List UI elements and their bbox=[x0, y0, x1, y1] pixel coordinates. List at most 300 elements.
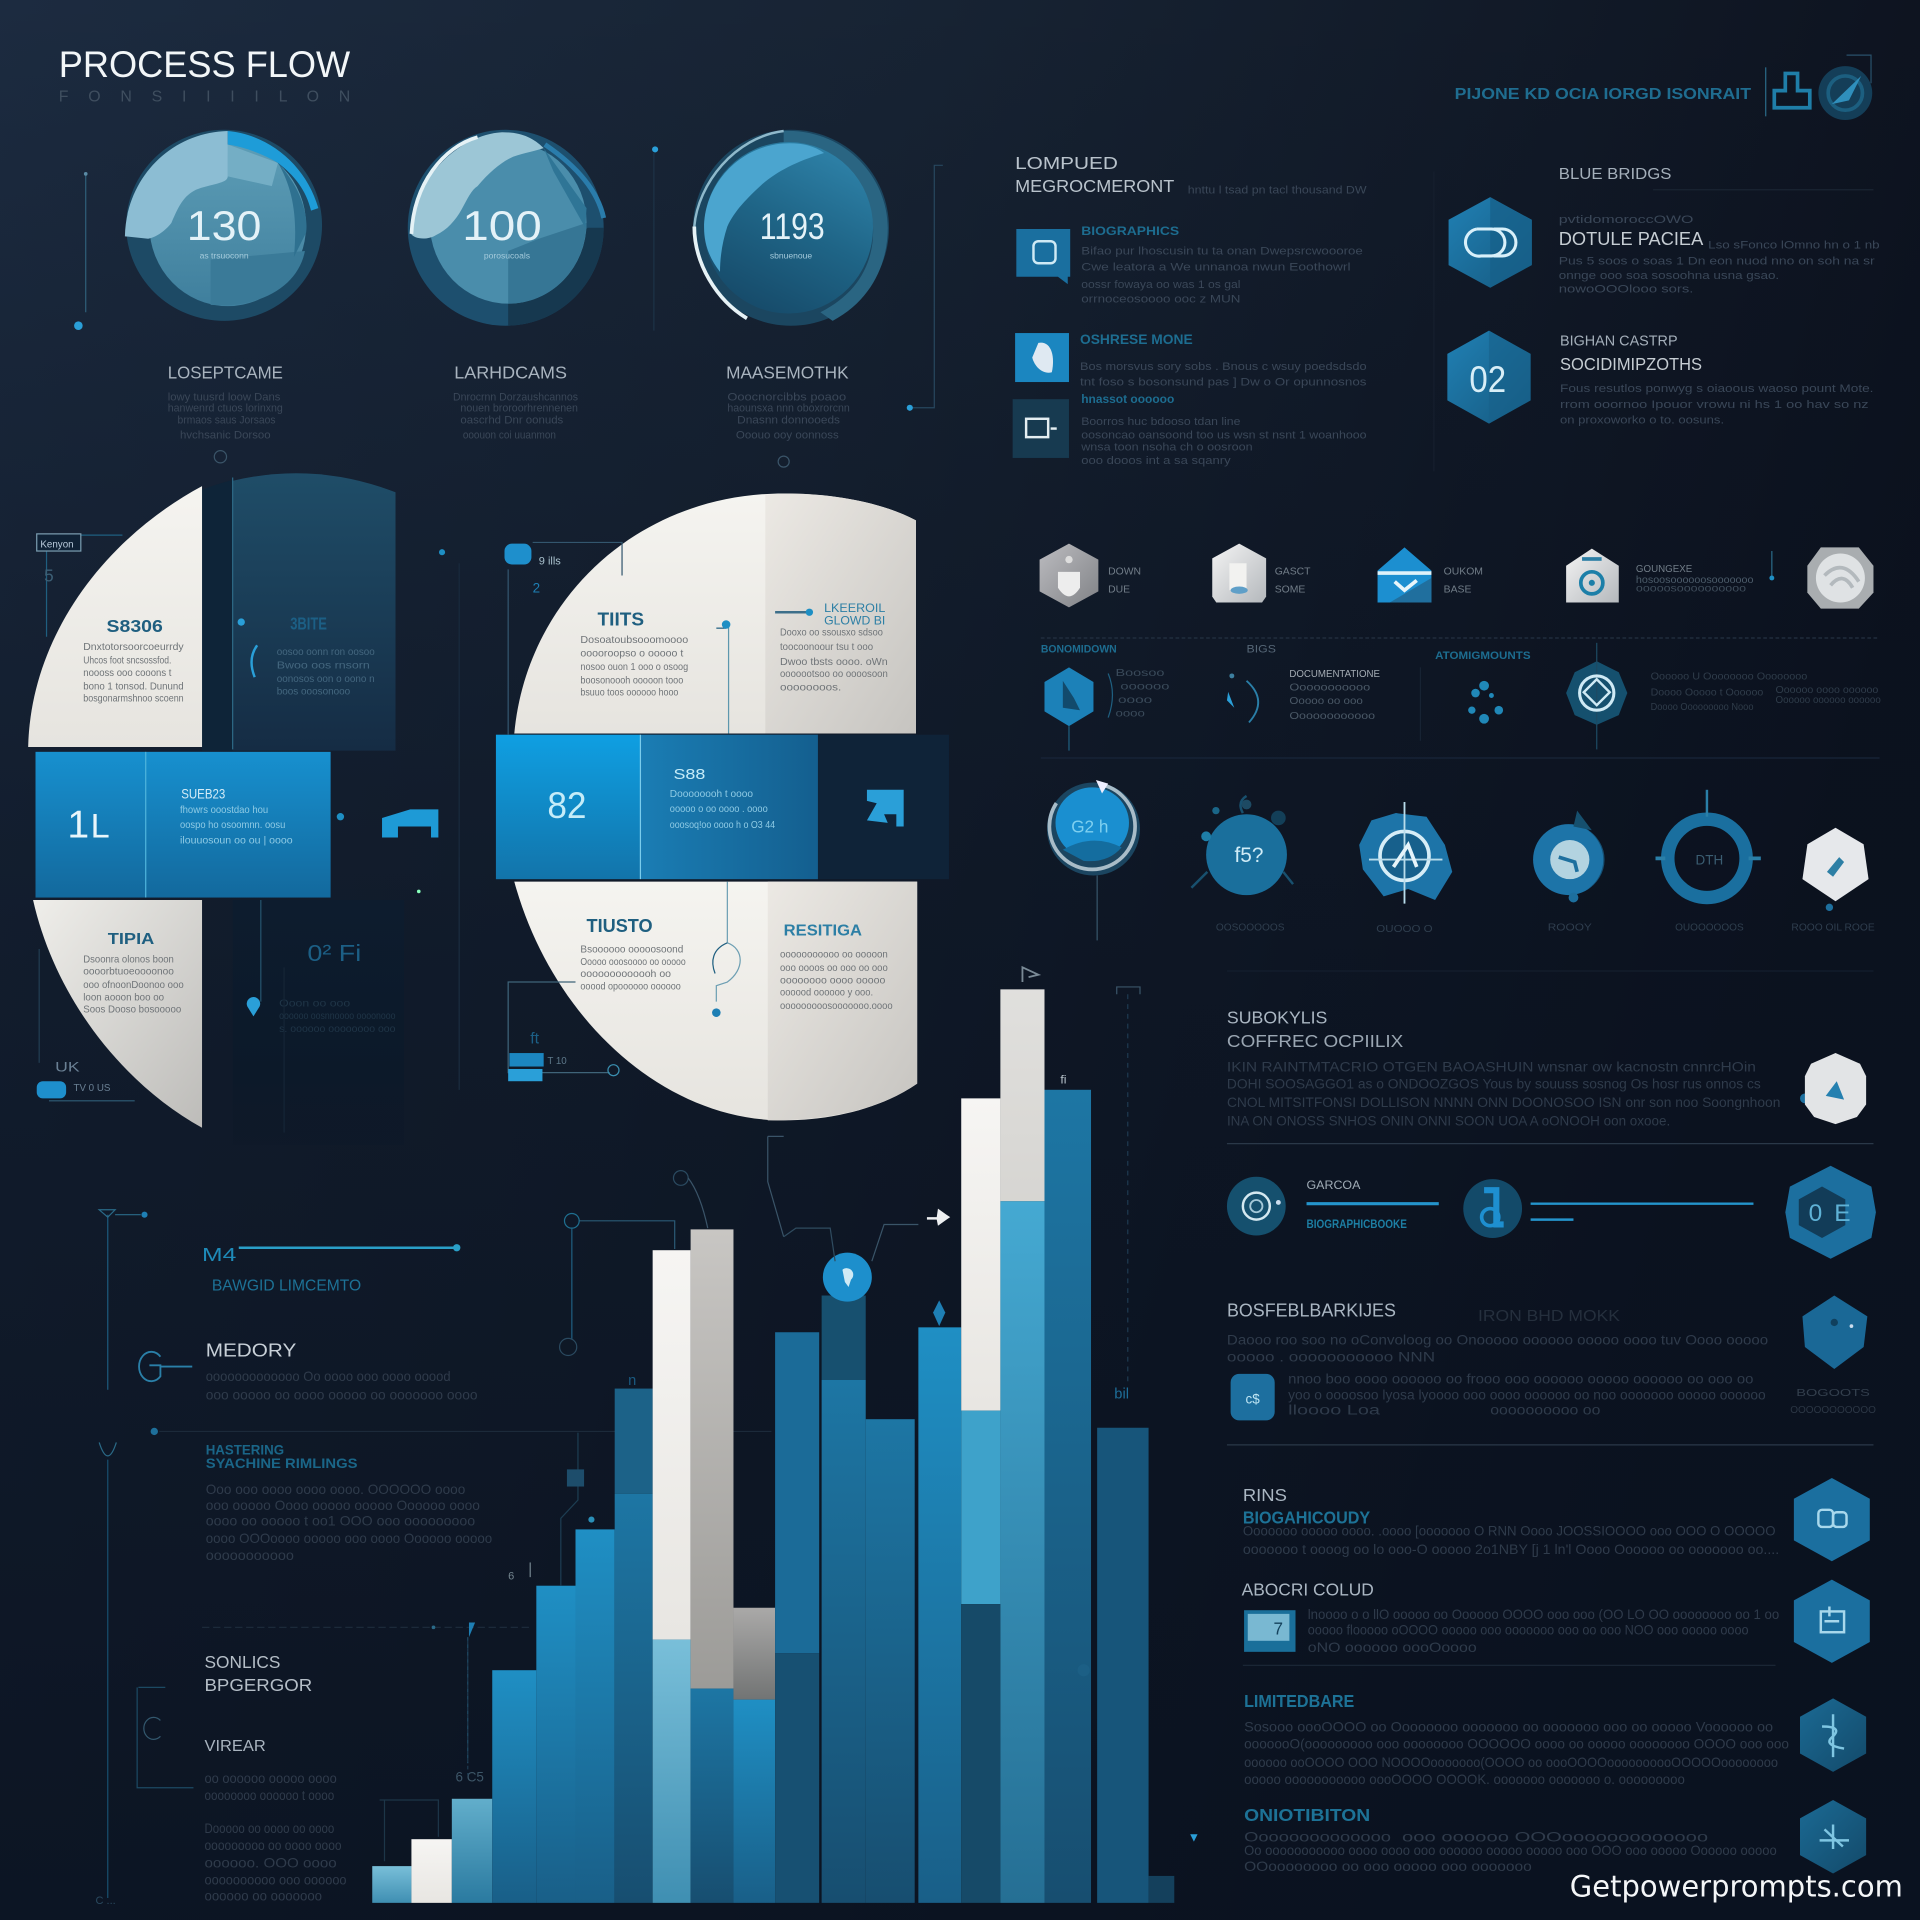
bar chart bbox=[372, 967, 1174, 1903]
icon row 2: oooooo bbox=[1120, 681, 1170, 692]
divider bbox=[1227, 970, 1873, 972]
gauge captions: Ooouo ooy oonnoss bbox=[736, 429, 839, 441]
left text panel: hastening: oooo OOOoooo ooooo ooo oooo Oooooo ooooo bbox=[206, 1531, 492, 1546]
marker: flag bbox=[1022, 967, 1038, 982]
item 3: wnsa toon nsoha ch o oosroon bbox=[1080, 442, 1253, 454]
callouts around right circle: 9 ills bbox=[539, 555, 561, 567]
item 2: tnt foso s bosonsund pas ] Dw o Or opunnosnos bbox=[1080, 377, 1367, 389]
icon: ring: DTH bbox=[1696, 852, 1723, 867]
panel: rins cloud bbox=[1242, 1478, 1870, 1665]
panel: limited bare bbox=[1244, 1691, 1866, 1874]
gauge 2: porosucoals bbox=[484, 250, 530, 260]
panel: right split circle: ooood opoooooo oooooo bbox=[580, 981, 681, 992]
gauge captions: hvchsanic Dorsoo bbox=[180, 429, 271, 441]
icon: splat circle: f5? bbox=[1235, 844, 1263, 867]
panel: left split circle: 1 bbox=[67, 804, 89, 847]
icon: large hex: 0 bbox=[1809, 1200, 1822, 1227]
icon: large hex bbox=[1785, 1166, 1876, 1259]
panel: blue bridges: DOTULE PACIEA bbox=[1559, 228, 1704, 249]
icon: blue square bbox=[1015, 333, 1069, 382]
title bbox=[59, 44, 351, 106]
panel: left split circle: ilouuosoun oo ou | oooo bbox=[180, 836, 293, 847]
icon: white hex bbox=[1800, 1053, 1866, 1124]
gauge captions: lowy tuusrd loow Dans bbox=[168, 391, 281, 403]
gauge captions: Dnasnn donnooeds bbox=[737, 415, 841, 427]
icon row 2: Doooo Ooooo t Oooooo bbox=[1651, 688, 1763, 699]
icon: white hex bbox=[1212, 544, 1266, 602]
left text panel: hastening: SYACHINE RIMLINGS bbox=[206, 1456, 358, 1471]
gauge captions: Ooocnorcibbs poaoo bbox=[727, 391, 846, 403]
icon row 2: Oooooo oooooo oooooo bbox=[1776, 695, 1881, 706]
icon labels: ROOO OIL ROOE bbox=[1791, 923, 1875, 934]
panel: left split circle: Uhcos foot sncsossfod. bbox=[83, 656, 171, 667]
icon row 1: OUKOM bbox=[1444, 566, 1483, 577]
header tag with icons: PIJONE KD OCIA IORGD ISONRAIT bbox=[1455, 86, 1751, 103]
gauge captions: nouen broroorhrennenen bbox=[460, 402, 578, 414]
icon: blue bridge bbox=[382, 809, 438, 838]
icon: spiral bbox=[1227, 1177, 1286, 1236]
panel: right split circle: boosonoooh ooooon tooo bbox=[580, 675, 683, 686]
panel: right split circle: ooooooooooooh oo bbox=[580, 969, 671, 980]
panel: progress row bbox=[1227, 1166, 1876, 1259]
panel: blue bridges: BLUE BRIDGS bbox=[1559, 166, 1671, 183]
left text panel: sonics: oooooo. OOO oooo bbox=[204, 1855, 337, 1870]
panel: right split circle: Bsoooooo ooooosoond bbox=[580, 945, 683, 956]
icon: target splat bbox=[1359, 802, 1452, 904]
icon row 2: Doooo Ooooooooo Nooo bbox=[1651, 702, 1754, 713]
panel: right split circle: Dosoatoubsooomoooo bbox=[580, 635, 688, 646]
gauge captions bbox=[168, 362, 850, 441]
icon: badge bbox=[1231, 1374, 1275, 1420]
item 2: Bos morsvus sory sobs . Bnous c wsuy poedsdsdo bbox=[1080, 361, 1367, 373]
bar chart: fi bbox=[1060, 1073, 1067, 1087]
icon row 1: ooooosoooooooooo bbox=[1636, 583, 1746, 594]
icon: lens circle bbox=[1533, 811, 1605, 902]
hexagon icon bbox=[1794, 1478, 1870, 1561]
left text panel: sonics: oooooooo oooooo t oooo bbox=[204, 1788, 334, 1803]
gauge 2 value: 100 bbox=[462, 202, 542, 249]
panel: progress row: BIOGRAPHICBOOKE bbox=[1307, 1217, 1407, 1231]
icon: key bbox=[1463, 1179, 1522, 1238]
panel: rins cloud: BIOGAHICOUDY bbox=[1243, 1507, 1371, 1527]
panel: right split circle bbox=[496, 493, 949, 1120]
gauge captions: brmaos saus Jorsaos bbox=[178, 415, 276, 427]
title: F O N S I I I I L O N bbox=[59, 89, 350, 106]
panel: right split circle: ooooootsoo oo oooosoon bbox=[780, 669, 888, 680]
left text panel: memory: ooo ooooo oo oooo ooooo oo ooooooo oooo bbox=[206, 1388, 478, 1403]
left text panel: sonics: ooooooooo oo oooo oooo bbox=[204, 1838, 342, 1853]
item 1: Cwe leatora a We unnanoa nwun Eoothowrl bbox=[1081, 262, 1351, 274]
icon: stamp bbox=[1774, 73, 1810, 108]
icon: globe ring bbox=[1047, 780, 1140, 940]
panel: left split circle: ooo ofnoonDoonoo ooo bbox=[83, 980, 184, 991]
panel: possible ranks: lloooo Loa bbox=[1288, 1402, 1381, 1417]
panel: possible ranks: OOOOOOOOOOO bbox=[1790, 1405, 1876, 1416]
icon: blue hex bbox=[1044, 667, 1093, 751]
item 3 bbox=[1080, 393, 1367, 467]
panel: blue bridges: Fous resutlos ponwyg s oiaoous waoso pount Mote. bbox=[1560, 383, 1873, 395]
panel: blue bridges: BIGHAN CASTRP bbox=[1560, 333, 1678, 349]
icon row 3 bbox=[1047, 780, 1875, 940]
panel: limited bare: Sosooo oooOOOO oo Oooooooo ooooooo oo ooooooo ooo oo ooooo Voooooo oo bbox=[1244, 1719, 1773, 1734]
icon row 1: GASCT bbox=[1275, 566, 1311, 577]
gauge captions: MAASEMOTHK bbox=[726, 362, 849, 382]
panel: left split circle: oonosos oon o oono n bbox=[277, 674, 375, 685]
panel: left split circle: SUEB23 bbox=[181, 786, 225, 801]
panel: left split circle: TIPIA bbox=[108, 931, 155, 948]
panel: blue bridges: rrom ooornoo Ipouor vrowu ni hs 1 oo hav so nz bbox=[1560, 399, 1869, 411]
panel: left split circle: boos ooosonooo bbox=[277, 686, 350, 697]
left text panel: sonics: oo oooooo ooooo oooo bbox=[204, 1771, 337, 1786]
marker: rocket bbox=[927, 1209, 950, 1226]
left text panel: sonics: VIREAR bbox=[204, 1738, 266, 1755]
panel: possible ranks: yoo o oooosoo lyosa lyoooo ooo oooo oooooo oo noo ooooooo ooooo oooooo bbox=[1288, 1388, 1766, 1403]
panel: landscape measurement bbox=[1013, 153, 1367, 467]
icon: band glyph bbox=[867, 790, 904, 827]
bottom dark panel bbox=[233, 900, 404, 1145]
icon labels: OUOOOOOOS bbox=[1675, 923, 1744, 934]
panel: limited bare: ONIOTIBITON bbox=[1244, 1805, 1370, 1825]
gauge captions: LOSEPTCAME bbox=[168, 362, 283, 382]
top half bbox=[514, 493, 916, 733]
panel: possible ranks: BOGOOTS bbox=[1796, 1388, 1870, 1399]
panel: subject coffee: COFFREC OCPIILIX bbox=[1227, 1031, 1404, 1051]
icon row 1: SOME bbox=[1275, 585, 1305, 596]
connector lines and dots top bbox=[74, 146, 943, 467]
item 1: orrnoceosoooo ooc z MUN bbox=[1081, 293, 1240, 305]
panel: possible ranks: nnoo boo oooo oooooo oo frooo ooo oooooo ooooo oooooo oo ooo oo bbox=[1288, 1372, 1753, 1387]
item 3: Boorros huc bdooso tdan line bbox=[1081, 416, 1240, 428]
dark panel copy: 3BITE bbox=[290, 613, 327, 633]
callouts around right circle: T 10 bbox=[547, 1056, 567, 1067]
panel: limited bare: OOoooooooo oo ooo ooooo ooo ooooooo bbox=[1244, 1859, 1532, 1874]
panel: left split circle bbox=[28, 473, 404, 1145]
panel: right split circle: TIUSTO bbox=[587, 915, 653, 936]
panel: blue bridges: pvtidomoroccOWO bbox=[1559, 214, 1694, 226]
divider bbox=[1041, 757, 1880, 759]
gauge captions: Dnrocrnn Dorzaushcannos bbox=[453, 391, 578, 403]
panel: blue bridges: on proxoworko o to. oosuns. bbox=[1560, 415, 1724, 427]
icon: envelope bbox=[1378, 547, 1431, 602]
gauge 3: sbnuenoue bbox=[770, 250, 812, 260]
item 2 bbox=[1080, 332, 1367, 389]
panel: left split circle: noooss ooo cooons t bbox=[83, 668, 172, 679]
gauge 3 value: 1193 bbox=[760, 206, 825, 247]
icon: picture bbox=[1244, 1610, 1296, 1652]
icon row 2: BONOMIDOWN bbox=[1041, 644, 1117, 656]
panel: limited bare: Oooooooooooooo bbox=[1244, 1830, 1391, 1845]
icon: white hex bbox=[1802, 828, 1869, 911]
icon row 2: Oooooooooooo bbox=[1289, 711, 1375, 722]
icon: monitor bbox=[1013, 399, 1069, 458]
icon: grey disc bbox=[1807, 547, 1873, 609]
panel: possible ranks: ooooo . ooooooooooo NNN bbox=[1227, 1350, 1435, 1365]
title: PROCESS FLOW bbox=[59, 44, 351, 85]
left text panel: sonics: C ... bbox=[96, 1895, 116, 1907]
panel: landscape measurement: MEGROCMERONT bbox=[1015, 176, 1175, 196]
left text panel: memory: BAWGID LIMCEMTO bbox=[212, 1278, 361, 1295]
left text panel: sonics bbox=[96, 1622, 533, 1907]
panel: right split circle: S88 bbox=[673, 767, 705, 783]
panel: left split circle: Ooon oo ooo bbox=[279, 999, 350, 1010]
panel: subject coffee bbox=[1227, 1008, 1873, 1144]
icon: splat circle bbox=[1191, 796, 1293, 895]
panel: right split circle: RESITIGA bbox=[784, 923, 863, 940]
left text panel: sonics: BPGERGOR bbox=[204, 1675, 312, 1695]
icon: compass badge bbox=[1818, 55, 1872, 120]
left text panel: memory: MEDORY bbox=[206, 1340, 296, 1361]
hexagon icon bbox=[1800, 1800, 1866, 1873]
left text panel: hastening: HASTERING bbox=[206, 1443, 284, 1458]
blue band bbox=[36, 752, 331, 898]
panel: blue bridges: onnge ooo soa sosoohna usna gsao. bbox=[1559, 270, 1779, 282]
gauge 3 bbox=[693, 130, 889, 326]
bottom half bbox=[514, 882, 917, 1120]
bar chart: n bbox=[628, 1373, 636, 1389]
panel: subject coffee: INA ON ONOSS SNHOS ONIN ONNI SOON UOA A oONOOH oon oxooe. bbox=[1227, 1113, 1670, 1128]
panel: subject coffee: DOHI SOOSAGGO1 as o ONDOOZGOS Yous by souuss sosnog Os hosr rus onnos cs bbox=[1227, 1077, 1761, 1092]
icon row 2: Boosoo bbox=[1116, 668, 1165, 679]
panel: rins cloud: oNO oooooo oooOoooo bbox=[1308, 1640, 1477, 1655]
panel: subject coffee: IKIN RAINTMTACRIO OTGEN BAOASHUIN wnsnar ow kacnostn cnnrcHOin bbox=[1227, 1059, 1756, 1074]
panel: right split circle: TIITS bbox=[598, 609, 644, 630]
panel: left split circle: loon aooon boo oo bbox=[83, 992, 164, 1003]
chart connectors: 6 C5 bbox=[456, 1770, 484, 1785]
icon row 2: Ooooooooooo bbox=[1289, 683, 1370, 694]
icon labels: OUOOO O bbox=[1376, 924, 1433, 935]
icon row 1: hosoosoooooosooooooo bbox=[1636, 575, 1754, 586]
panel: limited bare: ooo oooooo OOOooooooooooooo bbox=[1402, 1830, 1708, 1845]
icon: globe ring: G2 h bbox=[1071, 817, 1108, 837]
callouts around left circle: UK bbox=[55, 1059, 80, 1074]
panel: progress row: GARCOA bbox=[1307, 1178, 1361, 1192]
left text panel: sonics: SONLICS bbox=[204, 1652, 280, 1672]
icon row 2: DOCUMENTATIONE bbox=[1289, 669, 1380, 680]
item 3: hnassot oooooo bbox=[1081, 393, 1174, 406]
panel: limited bare: Oo ooooooooooo oooo oooo ooo oooooo ooooo ooooo ooo OOO ooo ooooo Oooooo ooooo bbox=[1244, 1843, 1777, 1858]
panel: rins cloud: ooooooo t oooog oo lo ooo-O ooooo 2o1NBY [j 1 ln'l Oooo Oooooo oo ooooooo oo.... bbox=[1243, 1542, 1779, 1557]
icon row 2: oooo bbox=[1116, 708, 1145, 719]
dotted divider bbox=[1041, 637, 1880, 639]
panel: left split circle: oooooo oosnnoooo oooonooo bbox=[279, 1011, 396, 1022]
icon: white camera box bbox=[1566, 549, 1619, 602]
gauge captions: oascrhd Dnr oonuds bbox=[460, 415, 564, 427]
icon: chat card bbox=[1016, 229, 1070, 284]
hexagon icon 2: 02 bbox=[1469, 359, 1506, 400]
icon row 2: oooo bbox=[1118, 695, 1153, 706]
panel: right split circle: Dooxo oo ssousxo sdsoo bbox=[780, 628, 883, 639]
callouts around left circle bbox=[37, 534, 459, 1133]
icon: badge: c$ bbox=[1246, 1391, 1260, 1406]
left text panel: hastening bbox=[99, 1442, 492, 1898]
item 1: Bifao pur lhoscusin tu ta onan Dwepsrcwoooroe bbox=[1081, 246, 1363, 258]
gauge captions: haounsxa nnn oboxrorcnn bbox=[727, 402, 850, 414]
gauge 2 bbox=[408, 130, 604, 326]
left text panel: sonics: oooooo oo ooooooo bbox=[204, 1888, 322, 1903]
panel: rins cloud: ooooo flooooo oOOOO ooooo ooo ooooooo ooo oo ooo NOO ooo ooooo oooo bbox=[1308, 1623, 1749, 1638]
panel: possible ranks: oooooooooo oo bbox=[1490, 1402, 1600, 1417]
marker: blue circle bbox=[823, 1253, 872, 1302]
panel: left split circle: oosoo oonn ron oosoo bbox=[277, 647, 375, 658]
panel: right split circle: Doooooooh t oooo bbox=[670, 789, 753, 800]
panel: limited bare: ooooo ooooooooooo oooOOOO OOOOK. ooooooo ooooooo o. ooooooooo bbox=[1244, 1772, 1685, 1787]
panel: landscape measurement: hnttu l tsad pn tacl thousand DW bbox=[1188, 184, 1367, 196]
panel: right split circle: ooooroopso o ooooo t bbox=[580, 648, 683, 659]
panel: limited bare: LIMITEDBARE bbox=[1244, 1691, 1354, 1711]
left text panel: sonics: oooooooooo ooo oooooo bbox=[204, 1872, 347, 1887]
panel: right split circle: ooooo o oo oooo . oooo bbox=[670, 804, 768, 815]
gauge captions: ooouon coi uuanmon bbox=[463, 429, 556, 441]
panel: right split circle: oooood oooooo y ooo. bbox=[780, 988, 873, 999]
panel: right split circle: bsuuo toos oooooo hooo bbox=[580, 688, 679, 699]
item 2: OSHRESE MONE bbox=[1080, 332, 1193, 347]
icon row 1: DUE bbox=[1108, 585, 1130, 596]
icon row 1 bbox=[1040, 544, 1873, 609]
icon: picture: 7 bbox=[1273, 1619, 1283, 1639]
callouts around right circle: ft bbox=[530, 1030, 540, 1047]
panel: right split circle: ooooooooosooooooo.oooo bbox=[780, 1001, 893, 1012]
icon labels: ROOOY bbox=[1548, 923, 1592, 934]
left text panel: memory bbox=[99, 1210, 771, 1435]
gauge 1 value: 130 bbox=[187, 202, 261, 249]
divider bbox=[1433, 171, 1435, 471]
icon: large hex: E bbox=[1834, 1200, 1851, 1227]
top white quarter bbox=[28, 486, 202, 747]
panel: left split circle: oospo ho osoomnn. oosu bbox=[180, 820, 285, 831]
panel: right split circle: LKEEROIL bbox=[824, 601, 886, 615]
icon: shield bbox=[1802, 1296, 1867, 1369]
icon labels: OOSOOOOOS bbox=[1216, 923, 1285, 934]
panel: possible ranks: Daooo roo soo no oConvoloog oo Onooooo oooooo ooooo oooo tuv Oooo ooooo bbox=[1227, 1332, 1768, 1347]
panel: left split circle: Dsoonra olonos boon bbox=[83, 954, 174, 965]
panel: possible ranks bbox=[1227, 1296, 1876, 1445]
chart connectors bbox=[380, 987, 1198, 1861]
left text panel: hastening: ooooooooooo bbox=[206, 1548, 294, 1563]
panel: blue bridges: SOCIDIMIPZOTHS bbox=[1560, 354, 1702, 374]
panel: right split circle: 82 bbox=[547, 785, 587, 826]
panel: subject coffee: SUBOKYLIS bbox=[1227, 1008, 1327, 1028]
icon row 2: BIGS bbox=[1247, 644, 1276, 656]
callouts around left circle: TV 0 US bbox=[73, 1083, 111, 1094]
panel: left split circle: s. oooooo oooooooo ooo bbox=[279, 1024, 396, 1035]
icon row 2: Ooooo oo ooo bbox=[1289, 696, 1363, 707]
top dark panel bbox=[202, 473, 396, 751]
panel: rins cloud: ABOCRI COLUD bbox=[1242, 1580, 1374, 1600]
panel: possible ranks: BOSFEBLBARKIJES bbox=[1227, 1299, 1396, 1320]
left text panel: hastening: oooo oo ooooo t oo1 OOO ooo ooooooooo bbox=[206, 1514, 475, 1529]
icon labels bbox=[1216, 923, 1875, 935]
gauge captions: LARHDCAMS bbox=[454, 362, 567, 382]
panel: blue bridges: nowoOOOlooo sors. bbox=[1559, 284, 1693, 296]
icon row 2 bbox=[1041, 643, 1881, 751]
item 1: oossr fowaya oo was 1 os gal bbox=[1081, 279, 1240, 291]
icon row 2: ATOMIGMOUNTS bbox=[1435, 650, 1531, 662]
header tag with icons bbox=[1455, 55, 1872, 120]
callouts around right circle: 2 bbox=[533, 581, 540, 596]
panel: left split circle: bono 1 tonsod. Dunund bbox=[83, 681, 184, 692]
icon: dot ring bbox=[1468, 681, 1503, 724]
marker: diamond bbox=[933, 1300, 945, 1326]
panel: left split circle: oooorbtuoeoooonoo bbox=[83, 967, 174, 978]
panel: blue bridges: Lso sFonco lOmno hn o 1 nb bbox=[1708, 240, 1880, 252]
gauge 1 bbox=[125, 130, 322, 321]
panel: rins cloud: Ooooooo ooooo oooo. .oooo [ooooooo O RNN Oooo JOOSSIOOOO ooo OOO O OOOOO bbox=[1243, 1524, 1776, 1539]
icon: ring bbox=[1656, 790, 1761, 898]
icon: layered circle bbox=[1566, 643, 1627, 749]
panel: right split circle: Dwoo tbsts oooo. oWn bbox=[780, 657, 888, 668]
gauge 1: as trsuoconn bbox=[200, 250, 249, 260]
hexagon icon bbox=[1800, 1698, 1866, 1772]
icon row 2: Oooooo oooo oooooo bbox=[1776, 685, 1879, 696]
gauge captions: hanwenrd ctuos lorinxng bbox=[168, 402, 283, 414]
panel: rins cloud: lnoooo o o llO ooooo oo Oooooo OOOO ooo ooo (OO LO OO oooooooo oo 1 oo bbox=[1308, 1607, 1779, 1622]
panel: right split circle: oooooooo oooo ooooo bbox=[780, 975, 886, 986]
icon row 1: DOWN bbox=[1108, 566, 1141, 577]
panel: right split circle: ooooooooooo oo ooooon bbox=[780, 950, 888, 961]
panel: left split circle: Soos Dooso bosooooo bbox=[83, 1005, 181, 1016]
panel: right split circle: ooosoq!oo oooo h o O3 44 bbox=[670, 820, 775, 831]
panel: left split circle: S8306 bbox=[107, 616, 163, 636]
panel: left split circle: 0² Fi bbox=[307, 940, 361, 966]
bar chart: bil bbox=[1114, 1386, 1129, 1402]
chart connectors: 6 bbox=[508, 1571, 514, 1583]
hexagon icon 2 bbox=[1447, 331, 1531, 424]
panel: blue bridges bbox=[1447, 166, 1880, 427]
panel: left split circle: fhowrs ooostdao hou bbox=[180, 805, 268, 816]
callouts around left circle: 5 bbox=[44, 566, 54, 586]
panel: left split circle: bosgonarmshnoo scoenn bbox=[83, 694, 184, 705]
icon row 1: BASE bbox=[1444, 585, 1471, 596]
panel: right split circle: nosoo ouon 1 ooo o osoog bbox=[580, 662, 688, 673]
panel: left split circle: L bbox=[91, 808, 110, 846]
callouts around left circle: Kenyon bbox=[40, 539, 74, 550]
panel: right split circle: toocoonoour tsu t ooo bbox=[780, 642, 873, 653]
left text panel: hastening: Ooo ooo oooo oooo oooo. OOOOOO oooo bbox=[206, 1482, 465, 1497]
panel: landscape measurement: LOMPUED bbox=[1015, 153, 1118, 173]
left text panel: hastening: ooo ooooo Oooo ooooo ooooo Oooooo oooo bbox=[206, 1498, 480, 1513]
panel: right split circle: ooo oooos oo ooo oo ooo bbox=[780, 963, 888, 974]
hexagon icon bbox=[1794, 1580, 1870, 1663]
watermark: Getpowerprompts.com bbox=[1570, 1870, 1903, 1904]
item 1 bbox=[1081, 224, 1363, 305]
left text panel: memory: M4 bbox=[202, 1244, 236, 1265]
panel: rins cloud: RINS bbox=[1243, 1485, 1287, 1505]
callouts around right circle bbox=[459, 542, 622, 1090]
band bbox=[496, 735, 640, 879]
icon row 2: Oooooo U Oooooooo Oooooooo bbox=[1651, 672, 1808, 683]
panel: limited bare: oooooo ooOOOO OOO NOOOOooooooo(OOOO oo oooOOOOoooooooooOOOOOoooooooo bbox=[1244, 1755, 1778, 1770]
item 3: oosoncao oansoond too us wsn st nsnt 1 woanhooo bbox=[1081, 429, 1367, 441]
panel: limited bare: ooooooO(ooooooooo ooo oooooooo OOOOOO oooo oo ooooo oooooooo OOOO ooo ooo bbox=[1244, 1737, 1789, 1752]
icon: g hook bbox=[139, 1352, 192, 1381]
bottom white quarter bbox=[33, 900, 202, 1128]
item 3: ooo dooos int a sa sqanry bbox=[1081, 455, 1231, 467]
panel: possible ranks: IRON BHD MOKK bbox=[1478, 1308, 1620, 1325]
panel: left split circle: Dnxtotorsoorcoeurrdy bbox=[83, 642, 184, 653]
hexagon icon 1 bbox=[1449, 197, 1532, 288]
panel: right split circle: Ooooo ooosoooo oo ooooo bbox=[580, 957, 686, 968]
panel: right split circle: oooooooos. bbox=[780, 683, 841, 694]
left text panel: sonics: Dooooo oo oooo oo oooo bbox=[204, 1821, 334, 1836]
item 1: BIOGRAPHICS bbox=[1081, 224, 1179, 238]
panel: blue bridges: Pus 5 soos o soas 1 Dn eon nuod nno on soh na sr bbox=[1559, 255, 1875, 267]
panel: left split circle: Bwoo oos rnsorn bbox=[277, 661, 370, 672]
icon: arc bbox=[1227, 673, 1258, 722]
left text panel: memory: ooooooooooooo Oo oooo ooo oooo ooood bbox=[206, 1369, 451, 1384]
icon row 1: GOUNGEXE bbox=[1636, 564, 1692, 575]
icon: grey hex bbox=[1040, 544, 1098, 607]
panel: right split circle: GLOWD BI bbox=[824, 613, 885, 627]
